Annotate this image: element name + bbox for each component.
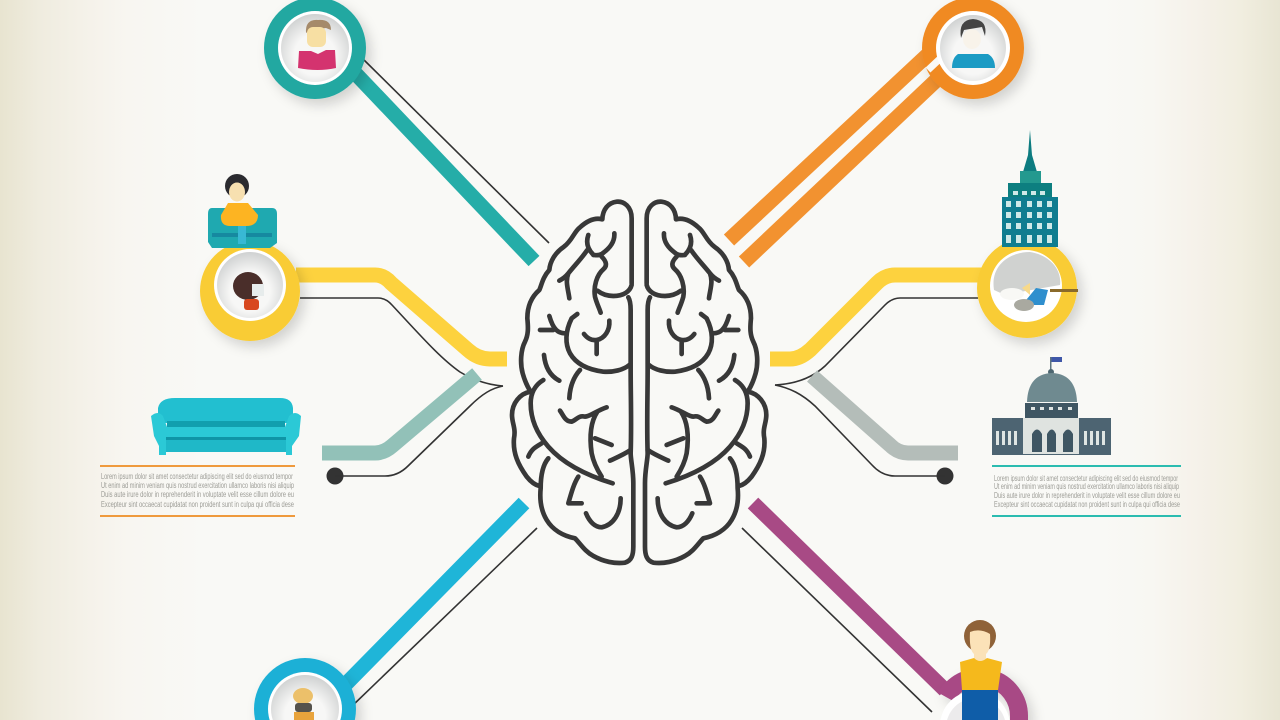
icon: capitol building [992, 357, 1111, 455]
text block: right caption: Lorem ipsum dolor sit amet consectetur adipiscing elit sed do eiusmod tempor [994, 474, 1178, 483]
connector: plum band bottom right [742, 503, 945, 712]
connector: blue band bottom left [340, 503, 537, 708]
text block: left caption: Ut enim ad minim veniam quis nostrud exercitation ullamco laboris nisi aliquip [101, 481, 294, 490]
connector: sage band left [322, 374, 503, 484]
text block: left caption [100, 465, 295, 517]
connector: grey band right [775, 376, 958, 484]
connector: yellow band right [770, 275, 985, 385]
node: teal person [264, 0, 366, 99]
connector: teal band top left [355, 58, 549, 261]
connector: yellow band left [296, 275, 507, 386]
left hemisphere [512, 202, 633, 563]
text block: right caption: Excepteur sint occaecat cupidatat non proident sunt in culpa qui officia dese [994, 500, 1180, 509]
brain [512, 202, 766, 563]
text block: left caption: Duis aute irure dolor in reprehenderit in voluptate velit esse cillum dolore eu [101, 490, 294, 499]
text block: right caption [992, 465, 1181, 517]
node: blue bottom left [254, 658, 356, 720]
node: yellow right [977, 238, 1078, 338]
node: plum with person [940, 620, 1019, 720]
node: yellow left with person [200, 241, 300, 341]
text block: left caption: Lorem ipsum dolor sit amet consectetur adipiscing elit sed do eiusmod tempor [101, 472, 293, 481]
text block: right caption: Ut enim ad minim veniam quis nostrud exercitation ullamco laboris nisi aliquip [994, 482, 1179, 491]
icon: standing person [960, 620, 1002, 720]
connector: orange bands top right [729, 48, 945, 262]
icon: person seated [208, 174, 277, 248]
icon: office tower [1002, 130, 1058, 247]
icon: sofa [151, 398, 301, 455]
text block: left caption: Excepteur sint occaecat cupidatat non proident sunt in culpa qui officia dese [101, 500, 294, 509]
text block: right caption: Duis aute irure dolor in reprehenderit in voluptate velit esse cillum dolore eu [994, 491, 1180, 500]
node: orange person [922, 0, 1024, 99]
right hemisphere [645, 202, 766, 563]
